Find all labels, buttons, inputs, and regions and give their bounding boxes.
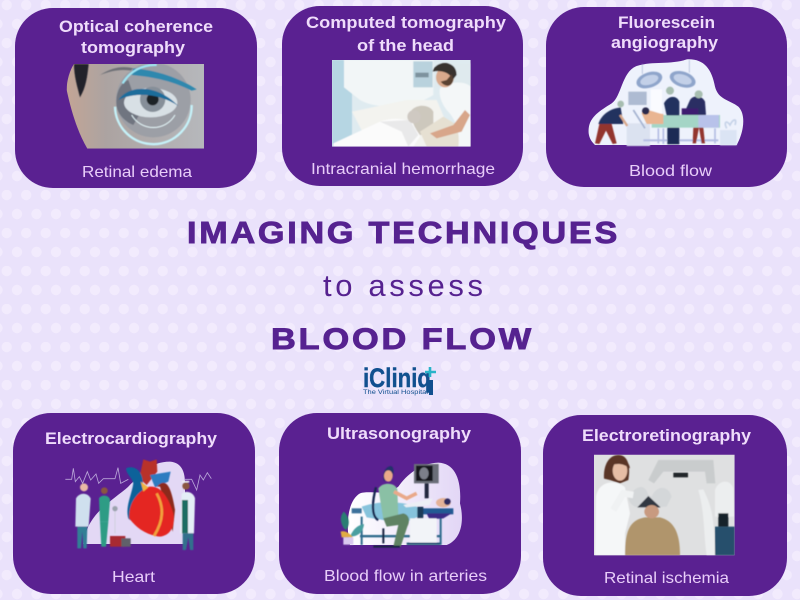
label: retinal edema: Retinal edema [82,164,192,181]
subheading: to assess: to assess [323,268,483,303]
heading: fluorescein angiography [611,13,719,52]
doctor right [180,492,195,533]
heading: fluorescein angiography: Fluorescein [618,13,715,32]
monitor [414,464,439,483]
plant [341,512,349,530]
heading: optical coherence tomography [59,17,213,57]
heading: computed tomography of the head: Computed tomography [306,13,507,32]
illustration: sonographer with patient and monitor [341,463,462,547]
photo: eye with scan rings [63,63,205,149]
heading: computed tomography of the head: of the head [357,36,454,55]
panel: ultrasonography [279,413,521,594]
heart [139,459,157,485]
panel: fluorescein angiography [546,7,787,187]
doctor middle [99,496,110,522]
label: blood flow: Blood flow [629,163,712,180]
panel: computed tomography of the head [282,6,523,186]
label: intracranial hemorrhage: Intracranial hemorrhage [311,161,495,178]
heading: electrocardiography: Electrocardiography [45,429,218,448]
title [187,215,620,356]
heading: imaging techniques: IMAGING TECHNIQUES [187,215,620,250]
bed and patient [652,115,720,128]
side table and plant [720,130,737,145]
photo: eye examination [594,455,735,555]
panel: electroretinography [543,415,787,596]
heading: optical coherence tomography: Optical coherence [59,17,213,36]
logo: iCliniq: The Virtual Hospital [363,389,429,396]
photo: CT scanner with patient and doctor [332,60,471,147]
surgeon left [598,107,623,124]
heading: optical coherence tomography: tomography [81,38,186,57]
surgeon right [683,96,706,115]
heading: ultrasonography: Ultrasonography [327,424,472,443]
panel: optical coherence tomography [15,8,257,188]
label: blood flow in arteries: Blood flow in arteries [324,568,487,585]
monitor device [110,536,125,547]
sonographer [383,466,394,482]
label: retinal ischemia: Retinal ischemia [604,570,729,587]
illustration: heart with medical team [65,459,211,550]
surgeon centre [664,97,679,115]
label: heart: Heart [112,569,156,586]
panel: electrocardiography [13,413,255,594]
illustration: surgical team in operating room [589,59,743,146]
logo: iCliniq: iCliniq [363,363,431,393]
heading: electroretinography: Electroretinography [582,426,752,445]
doctor left [75,494,91,527]
heading: computed tomography of the head [306,13,507,55]
heading: fluorescein angiography: angiography [611,33,719,52]
heading: blood flow: BLOOD FLOW [271,323,534,356]
